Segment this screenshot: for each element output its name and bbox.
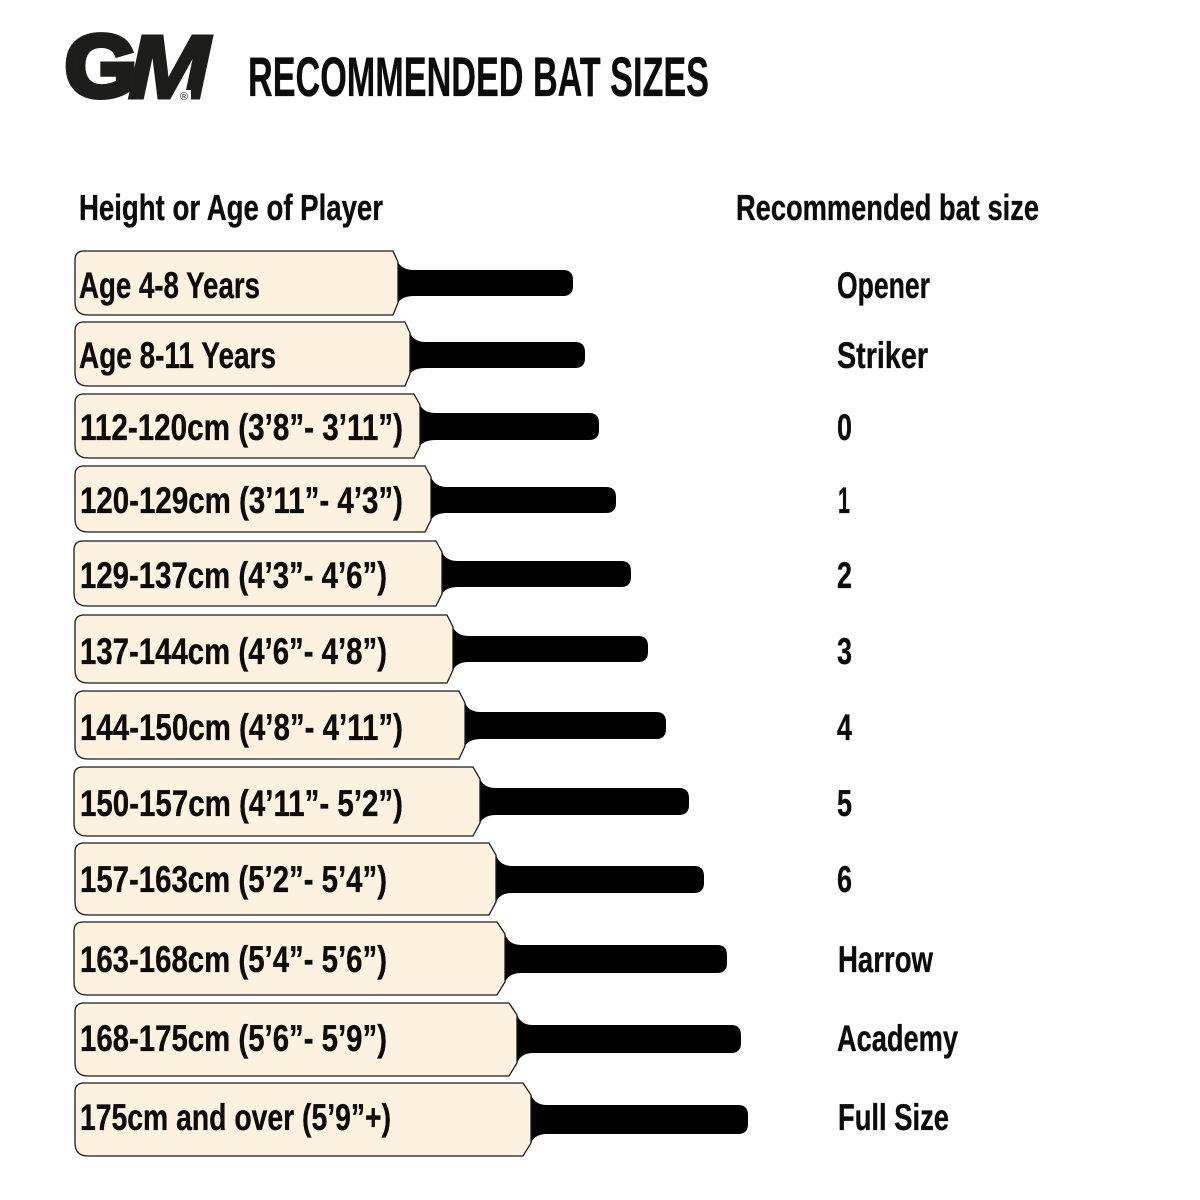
bat row: Age 8-11 Years: Age 8-11 Years [79, 335, 276, 376]
bat row: 157-163cm: 157-163cm (5’2”- 5’4”) [80, 859, 387, 900]
bat row: 157-163cm [75, 843, 852, 915]
bat row: 150-157cm: 5 [837, 783, 852, 824]
bat row: 144-150cm: 144-150cm (4’8”- 4’11”) [80, 707, 403, 748]
logo: GM: M [128, 18, 212, 118]
logo: GM: ® [180, 91, 188, 103]
bat row: Age 4-8 Years: Opener [837, 265, 930, 306]
bat row: Age 4-8 Years: Age 4-8 Years [79, 265, 260, 306]
bat row: 144-150cm: 4 [837, 707, 852, 748]
bat row: 157-163cm: 6 [837, 859, 852, 900]
bat row: 168-175cm [75, 1003, 958, 1076]
logo: GM: G [65, 18, 137, 115]
logo: GM [65, 18, 212, 118]
heading: height or age of player: Height or Age of Player [79, 187, 383, 228]
bat row: 163-168cm: 163-168cm (5’4”- 5’6”) [80, 939, 387, 980]
bat row: 175cm and over: Full Size [838, 1097, 949, 1138]
bat row: 150-157cm: 150-157cm (4’11”- 5’2”) [80, 783, 403, 824]
bat row: 129-137cm: 2 [837, 555, 852, 596]
bat row: Age 8-11 Years [75, 322, 928, 386]
heading: recommended bat size: Recommended bat size [736, 187, 1039, 228]
bat row: 137-144cm: 137-144cm (4’6”- 4’8”) [80, 631, 387, 672]
bat row: 129-137cm: 129-137cm (4’3”- 4’6”) [80, 555, 387, 596]
bat row: 120-129cm [75, 466, 850, 532]
bat row: 129-137cm [74, 541, 852, 606]
bat row: 168-175cm: 168-175cm (5’6”- 5’9”) [80, 1018, 387, 1059]
bat row: 175cm and over [75, 1083, 949, 1156]
bat row: 175cm and over: 175cm and over (5’9”+) [80, 1097, 391, 1138]
bat row: 112-120cm: 0 [837, 407, 852, 448]
bat row: 150-157cm [74, 767, 852, 836]
bat row: 168-175cm: Academy [837, 1018, 958, 1059]
bat row: 120-129cm: 120-129cm (3’11”- 4’3”) [80, 480, 403, 521]
bat row: 144-150cm [75, 691, 852, 759]
bat row: 137-144cm [75, 615, 852, 683]
bat row: Age 8-11 Years: Striker [837, 335, 928, 376]
bat row: 112-120cm: 112-120cm (3’8”- 3’11”) [80, 407, 403, 448]
bat row: 137-144cm: 3 [837, 631, 852, 672]
title: RECOMMENDED BAT SIZES [248, 45, 709, 108]
bat row: 163-168cm [74, 922, 933, 995]
bat row: Age 4-8 Years [75, 251, 930, 315]
bat row: 112-120cm [75, 394, 852, 458]
bat row: 163-168cm: Harrow [838, 939, 933, 980]
bat row: 120-129cm: 1 [838, 480, 850, 521]
